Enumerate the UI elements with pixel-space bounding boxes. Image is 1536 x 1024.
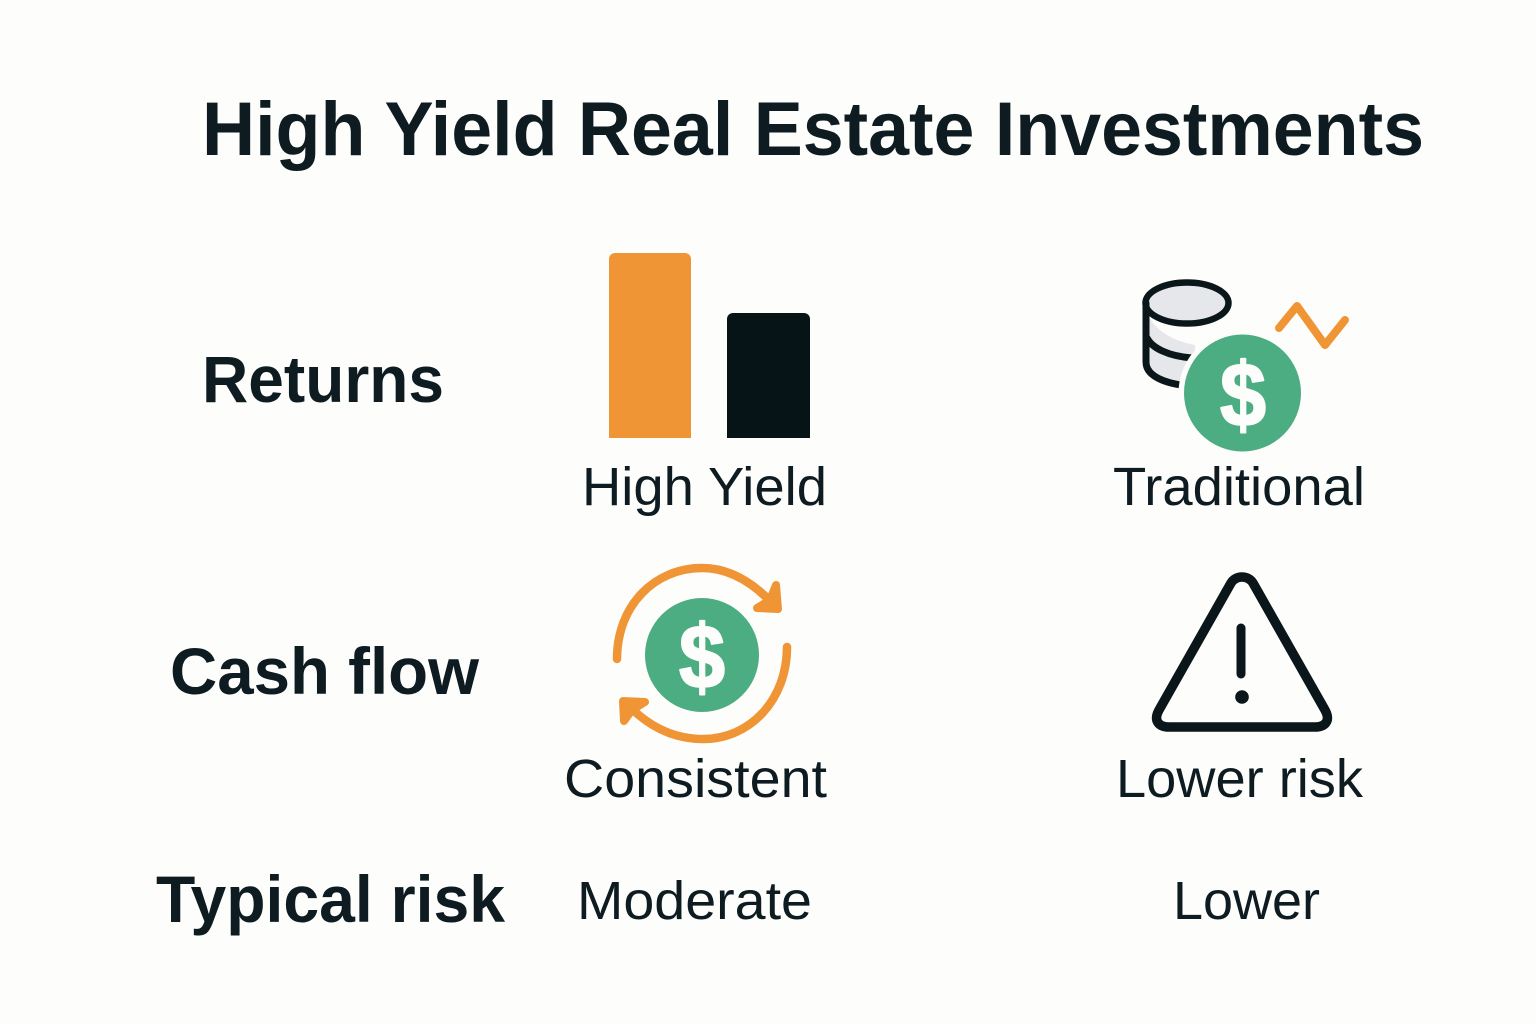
row heading: Typical risk: Typical risk (156, 862, 505, 936)
label: Consistent: Consistent (564, 749, 827, 809)
title: High Yield Real Estate Investments (202, 87, 1424, 172)
icon: warning triangle (1157, 577, 1327, 727)
row heading: Returns: Returns (202, 342, 444, 416)
label: Lower risk: Lower risk (1116, 749, 1364, 809)
icon: traditional coins with dollar and trend line: $ (1220, 346, 1266, 446)
label: Traditional: Traditional (1113, 457, 1365, 517)
value: Lower: Lower (1173, 871, 1320, 931)
icon: consistent cash cycle: $ (679, 608, 725, 708)
row heading: Cash flow: Cash flow (170, 634, 480, 708)
icon: consistent cash cycle (617, 568, 787, 739)
label: High Yield: High Yield (582, 457, 827, 517)
icon: traditional coins with dollar and trend line (1146, 282, 1345, 457)
icon: high yield bar chart (609, 253, 810, 438)
value: Moderate: Moderate (577, 871, 812, 931)
